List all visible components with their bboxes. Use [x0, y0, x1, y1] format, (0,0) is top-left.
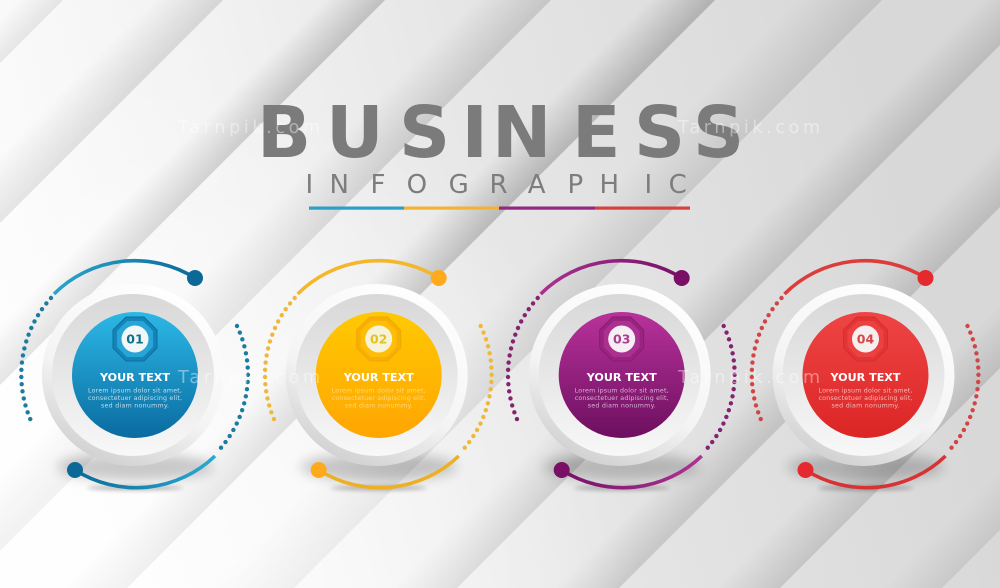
bottom arc with end dot — [311, 456, 459, 488]
body text — [88, 388, 182, 410]
octagon badge with number: 02 — [370, 332, 387, 346]
body text: consectetuer adipiscing elit, — [332, 395, 426, 402]
bottom arc with end dot — [554, 456, 702, 488]
body text — [332, 388, 426, 410]
body text: sed diam nonummy. — [832, 402, 900, 410]
step 02: yellow circle — [265, 261, 492, 490]
heading: YOUR TEXT — [586, 371, 657, 384]
octagon badge with number — [600, 317, 644, 361]
top arc with end dot — [784, 261, 934, 294]
octagon badge with number — [844, 317, 888, 361]
heading: YOUR TEXT — [99, 371, 170, 384]
watermarks: Tarnpik.com — [677, 118, 820, 138]
watermarks: Tarnpik.com — [177, 118, 320, 138]
body text: sed diam nonummy. — [588, 402, 656, 410]
body text: sed diam nonummy. — [345, 402, 413, 410]
step 03: purple circle — [508, 261, 735, 490]
body text: Lorem ipsum dolor sit amet, — [332, 388, 426, 394]
body text: Lorem ipsum dolor sit amet, — [818, 388, 912, 394]
body text: consectetuer adipiscing elit, — [88, 395, 182, 402]
coloured disc — [802, 312, 928, 438]
title: BUSINESS: BUSINESS — [257, 91, 744, 174]
octagon badge with number — [113, 317, 157, 361]
dotted arcs — [265, 298, 492, 450]
bottom arc with end dot — [67, 456, 215, 488]
white ring — [529, 284, 711, 466]
title underline: four colour bar — [309, 206, 690, 210]
bottom arc with end dot — [798, 456, 946, 488]
watermarks: Tarnpik.com — [677, 368, 820, 388]
octagon badge with number: 03 — [613, 332, 630, 346]
body text — [818, 388, 912, 410]
top arc with end dot — [54, 261, 203, 294]
octagon badge with number: 01 — [126, 332, 144, 346]
coloured disc — [316, 312, 442, 438]
step 04: red circle — [752, 261, 978, 490]
body text: Lorem ipsum dolor sit amet, — [88, 388, 182, 394]
dotted arcs — [21, 298, 248, 450]
body text: sed diam nonummy. — [101, 402, 169, 410]
body text — [575, 388, 669, 410]
octagon badge with number — [357, 317, 401, 361]
dotted arcs — [752, 298, 978, 450]
coloured disc — [559, 312, 685, 438]
top arc with end dot — [541, 261, 690, 294]
body text: consectetuer adipiscing elit, — [818, 395, 912, 402]
body text: consectetuer adipiscing elit, — [575, 395, 669, 402]
subtitle: INFOGRAPHIC: INFOGRAPHIC — [306, 170, 687, 200]
white ring — [286, 284, 468, 466]
dotted arcs — [508, 298, 735, 450]
watermarks — [177, 118, 820, 388]
step 01: blue circle — [21, 261, 248, 490]
coloured disc — [72, 312, 198, 438]
octagon badge with number: 04 — [857, 332, 874, 346]
white ring — [42, 284, 224, 466]
top arc with end dot — [298, 261, 447, 294]
white ring — [772, 284, 954, 466]
watermarks: Tarnpik.com — [177, 368, 320, 388]
body text: Lorem ipsum dolor sit amet, — [575, 388, 669, 394]
heading: YOUR TEXT — [343, 371, 414, 384]
heading: YOUR TEXT — [829, 371, 901, 384]
